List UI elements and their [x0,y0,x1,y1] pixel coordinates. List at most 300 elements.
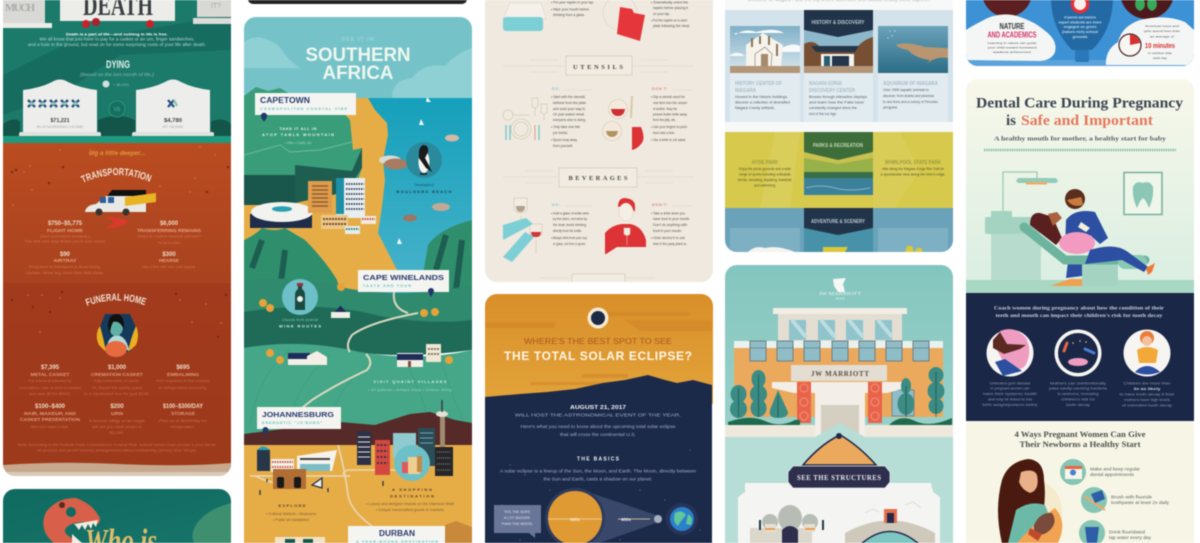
text: napkin don't: napkin before placing it [653,6,688,10]
costs: transportation: Update: More leg room than first class. [26,270,104,275]
text: boulders beach: See penguins at [414,183,434,187]
costs: funeral home: Note: According to the Federal Trade Commission's Funeral Rule, funeral homes must provide a price list for [18,442,217,447]
banner: history and discovery: HISTORY & DISCOVERY [812,20,865,26]
icon: hearse [85,190,156,228]
banner: see the structures [788,466,890,488]
costs: funeral home: URN [111,411,123,416]
houses [288,306,441,367]
card: niagara gorge: end of the Ice Age. [809,112,837,116]
trees [728,367,952,425]
text: beverages don't: have food in your mouth. [653,217,690,221]
stadium [250,202,313,228]
text: quaint villages [368,379,452,392]
text: explore [266,503,316,522]
card: niagara gorge: Browse through interactive displays [809,95,867,99]
text: shopping: DESTINATION [390,494,434,498]
text: bacteria: tooth decay [1066,403,1090,407]
costs: transportation: $300 [162,252,176,258]
costs: funeral home: is refrigerated correctly. [158,385,208,390]
cape town label [255,93,356,122]
landmark buildings [257,446,383,495]
panel: solar eclipse infographic [485,294,713,543]
navy section [966,293,1194,421]
gravestone: at home [132,80,214,137]
logo [819,278,861,300]
cloud: outdoor play: an average of [1150,34,1174,38]
text: utensils don't: • Use a knife to cut salad. [651,138,686,142]
icon: table setting [503,98,547,140]
card: history center: Housed in five historic buildings, [735,95,788,99]
costs: funeral home: $100–$300/DAY [163,404,203,410]
icon: fortune teller [97,314,138,357]
cloud: nature and academics: academic achievement [993,50,1031,54]
sailboats [397,97,431,244]
tip: dental appointments [1060,459,1141,485]
dig a little deeper: dig a little deeper... [89,150,145,157]
mother and baby [998,459,1062,543]
mountains and night sky [485,375,712,543]
heading: utensils [503,56,694,75]
text: beverages do: • Always drink from your cup [551,236,587,240]
card: aquarium [878,26,948,122]
text: beverages don't: • Take a drink when you [651,212,685,216]
text: utensils do: everyone else is doing. [553,118,586,122]
text: napkin do: • Put your napkin in your lap. [551,0,594,4]
section: parks and recreation: HYDE PARK [752,160,778,166]
title: WHERE'S THE BEST SPOT TO SEE [524,337,672,346]
bedrock strip [2,462,232,476]
heading: funeral home: FUNERAL HOME [84,292,147,306]
card: history center: discover a collection of diversified [735,100,790,104]
icon: penguin [406,142,442,178]
cloud: outdoor play: American boys and [1145,24,1179,28]
costs: transportation: The fee is a killer. [157,240,181,245]
heading: the basics: A solar eclipse is a lineup of the Sun, the Moon, and Earth. The Moon, directly between [500,468,696,474]
text: beverages do [551,203,592,246]
text: utensils do: from yourself. [553,144,573,148]
clouds [244,37,472,98]
costs: funeral home: Plus up to $100/day for [159,418,208,423]
text: bacteria: to newborns, increasing [1058,392,1098,396]
tip: dental appointments: Make and keep regular [1090,466,1141,472]
dental unit [985,211,1041,282]
gravestones header: IT? [211,3,221,10]
text: utensils don't: DON'T: [652,87,669,91]
text: table mountain: ATOP TABLE MOUNTAIN [262,132,334,137]
text: beverages do: by the stem, red wine by [553,217,587,221]
circle: child [1124,330,1170,376]
costs: transportation: (Non-cremated remains.) [40,234,91,238]
callout: sun size: A LOT BIGGER [504,516,531,520]
section: parks and recreation: range of sports including volleyball, [739,172,791,176]
icon: clock [1119,34,1141,56]
costs: funeral home: CASKET PRESENTATION [20,417,80,422]
costs: transportation: TRANSFERRING REMAINS [137,228,201,233]
text: bacteria: pass cavity-causing bacteria [1049,386,1107,390]
dome [803,433,876,465]
intro text: and a hole in the ground, but read on for some surprising costs of your life after death. [28,42,206,47]
cape town label: COSMOPOLITAN COASTAL VIBE [260,107,347,111]
costs: transportation: Required to transport a dead body. [29,264,101,269]
section: parks and recreation: Enjoy the picnic grounds and a wide [739,167,791,171]
cloud: outdoor play: in outdoor play [1148,51,1173,55]
text: child risk: 3x as likely [1134,387,1160,391]
title [976,96,1184,142]
text: beverages don't: • Order alcohol if no one [651,236,685,240]
costs: funeral home: $200 [110,404,124,410]
icon: saint mark's basilica [750,505,823,543]
text: beverages don't: DON'T: [652,203,669,207]
text: napkin do [551,0,594,17]
text: explore: • Cultural districts • Museums [266,512,316,516]
card: aquarium: AQUARIUM OF NIAGARA [883,81,938,87]
card: niagara gorge [804,10,873,122]
grass [3,116,231,136]
costs: funeral home: Not required if the corpse [156,378,211,383]
costs: funeral home: $3,000. [110,430,124,435]
gravestone: at home: AT HOME [162,125,184,129]
wine route badge: Choose from several [282,318,318,322]
orange trees [263,287,449,360]
gravestones header [3,0,231,28]
costs: transportation: HEARSE [159,258,179,263]
text: explore: EXPLORE [278,503,306,508]
vineyard hills [244,270,472,435]
soil: transportation [3,143,231,283]
hot air balloon: grounds [1072,35,1088,39]
title: Safe and Important [1021,113,1153,129]
icon: leaves [192,503,231,543]
text: utensils don't: • Dip a utensil used for [651,95,686,99]
cloud: outdoor play: 10 minutes [1145,43,1175,50]
text: bacteria: children's risk for [1061,398,1096,402]
text: shopping: • Unique handcrafted goods in markets [376,508,444,512]
text: utensils do: • Only take one bite [551,125,580,129]
circle: gum disease [986,329,1034,376]
wine route badge [279,279,321,328]
vs badge [109,101,125,117]
costs: funeral home [18,365,217,452]
costs: transportation: AIRTRAY [54,258,76,263]
section: adventure and scenery [725,208,953,252]
text: beverages do: directly from the bottle. [553,229,582,233]
text: utensils do: and work your way in. [553,107,586,111]
eclipse icon [588,308,608,328]
cliffs [244,228,344,292]
card: history center: NIAGARA [735,88,756,94]
costs: transportation: $6,000 [160,221,179,227]
text: utensils do: farthest from the plate [553,101,586,105]
text: child risk: to have tooth decay if their [1120,392,1176,396]
callout: sun size: YES, THE SUN'S [504,510,531,514]
patient in chair [1024,212,1155,286]
intro text: Death is a part of life—and nothing in life is free. [66,32,168,36]
text: shopping [366,487,454,512]
dark card sliver [248,0,467,4]
heading: transportation: TRANSPORTATION [80,167,152,183]
section: parks and recreation: PARKS & RECREATION [813,143,863,149]
text: napkin don't: • Put the napkin on a used [651,18,687,22]
text: beverages do: DO: [552,203,561,207]
text: utensils don't: one item into the vessel [653,101,687,105]
gravestone: nursing home [19,80,101,137]
text: napkin do: drinking from a glass. [553,13,585,17]
card: aquarium: Over 1500 aquatic animals to [883,88,929,92]
costs: transportation: Like a limo with zero curb appeal. [142,264,196,269]
title: THE TOTAL SOLAR ECLIPSE? [504,349,692,363]
text: gum disease: harm their systemic health [983,392,1037,396]
costs: funeral home: in a cardboard box for just $135. [84,391,150,396]
costs: funeral home: METAL CASKET [30,372,70,377]
logo: JW MARRIOTT [819,291,861,296]
intro text [515,405,681,437]
hot air balloon: of parents and teachers [1064,16,1096,20]
text: utensils don't: of another. Keep the [653,107,677,111]
heading: four ways: 4 Ways Pregnant Women Can Give [1014,430,1146,439]
hotel sign [791,365,887,381]
title [504,337,692,363]
icon: trees badge [1120,0,1174,19]
card: niagara gorge: NIAGARA GORGE [809,81,843,87]
section: parks and recreation [725,132,953,208]
panel: nature and academics infographic [966,0,1194,66]
heading: the basics: the Sun and Earth, casts a shadow on our planet. [544,476,652,482]
costs: funeral home: refrigeration. [170,424,196,429]
text: explore: • Public art installation [273,518,309,522]
table mountain [244,87,362,205]
cloud: outdoor play [1106,17,1194,65]
heading: dying: DYING [106,59,130,71]
costs: transportation: The last one-way ticket you'll ever need. [24,238,106,244]
text: utensils don't: food onto a fork. [653,131,675,135]
cloud: nature and academics: your child toward increased [988,46,1037,50]
soil specks [12,167,228,337]
text: beverages do: • Hold a glass of white wine [551,212,589,216]
text: gum disease: Untreated gum disease [990,382,1030,386]
icon: wine hands [503,198,542,262]
heading: the basics: THE BASICS [577,456,620,462]
durban mountain [445,521,472,543]
text: napkin don't [651,0,690,28]
text: child risk: mothers have high levels [1124,398,1170,402]
costs: transportation: Need to switch funeral parlors? [137,234,202,238]
text: utensils don't: from the jelly, etc. [653,118,676,122]
text: beverages don't: else in the party plans to. [653,242,687,246]
text: utensils do [551,87,592,148]
panel: jw marriott venice infographic [725,265,953,543]
text: beverages do: the bowl. Avoid drinking [553,223,586,227]
text: utensils don't [651,87,692,142]
cream section [966,421,1194,543]
logo: VENICE [835,298,845,300]
costs: funeral home: $100–$400 [35,404,66,410]
johannesburg label [257,407,341,436]
text: beverages don't: food in your mouth. [653,229,682,233]
intro text: Here's what you need to know about the upcoming total solar eclipse [520,424,676,429]
panel: dental care during pregnancy infographic [966,79,1194,543]
text: shopping: A SHOPPING [392,487,432,492]
text: beverages do: or glass, not from a spoon. [553,242,586,246]
soil: funeral home [3,283,231,468]
card: aquarium: discover, from sharks and piranhas [883,94,934,98]
hotel building [734,308,943,437]
heading: four ways [1014,430,1146,449]
sun moon earth diagram [545,488,698,543]
costs: funeral home: $1,000 [108,365,127,371]
costs: transportation: $90 [60,252,71,258]
gravestone: nursing home: IN A NURSING HOME [36,125,84,129]
costs: funeral home: Fully combustible, of course. [94,378,140,383]
text: utensils do: DO: [552,87,561,91]
forecourt wall [725,425,953,437]
text: napkin don't: plate following the meal. [653,24,690,28]
text: bacteria: Mothers can unintentionally [1050,382,1106,386]
section intro: teeth and mouth can impact their children's risk for tooth decay [996,313,1163,319]
tip: brushing [1081,487,1170,513]
text: boulders beach [396,183,452,194]
costs: funeral home: EMBALMING [167,372,200,377]
costs: funeral home: STORAGE [171,411,195,416]
section: parks and recreation: tennis, canoeing, kayaking, baseball, [738,178,792,182]
costs: funeral home: $695 [176,365,190,371]
text: boulders beach: BOULDERS BEACH [396,189,452,194]
cape town label: CAPETOWN [260,96,310,105]
cape winelands label: CAPE WINELANDS [363,273,444,282]
costs: funeral home: For a funeral followed by [28,378,72,383]
panel: southern africa infographic [244,17,472,543]
icon: t-rex skull [43,498,100,543]
panel: cost of death infographic [2,0,232,476]
gravestone: nursing home: $71,221 [50,118,70,124]
section: parks and recreation: and swimming. [754,184,776,188]
tip: fluoridated water: tap water every day [1109,535,1152,540]
heading: four ways: Their Newborns a Healthy Start [1020,440,1141,449]
durban building [275,537,325,543]
intro text: WILL HOST THE ASTRONOMICAL EVENT OF THE YEAR. [515,412,681,418]
costs: transportation: FLIGHT HOME [47,228,83,233]
costs: transportation: $750–$5,775 [48,221,83,227]
cloud: nature and academics: Learning in nature can guide [988,41,1037,45]
text: gum disease: in pregnant women can [990,386,1030,390]
section intro [994,306,1165,319]
section: parks and recreation: WHIRLPOOL STATE PARK [885,160,941,166]
cloud: nature and academics: NATURE [1000,22,1025,31]
title: SEE IT IN [341,37,375,43]
cape winelands label: TASTE AND TOUR [363,284,411,288]
heading: the basics [500,456,696,482]
hatched rule [984,149,1176,151]
circle: bacteria [1054,330,1102,376]
durban label [348,526,445,543]
title: AFRICA [322,63,394,84]
text: utensils don't: • Use your fingers to push [651,125,687,129]
title: Dental Care During Pregnancy [976,96,1184,112]
road [302,292,418,408]
section: adventure and scenery: ADVENTURE & SCENERY [811,219,866,225]
text: bacteria [1049,382,1107,407]
intro text: We all know that you have to pay for a casket or an urn, finger sandwiches, [40,36,194,42]
text: utensils do: per forkful. [553,131,568,135]
sun moon earth diagram: 400x [570,517,581,522]
dental lamp [1003,172,1058,212]
gravestone: at home: $4,780 [164,118,182,124]
text: quaint villages: VISIT QUAINT VILLAGES [374,379,447,384]
floor [966,280,1194,293]
costs: funeral home: all services and permit funerary arrangements without embalming (among other things). [37,448,197,452]
heading: beverages: BEVERAGES [568,175,628,182]
section: parks and recreation: Hike along the Niagara Gorge Rim Trail for [882,167,945,171]
intro text: AUGUST 21, 2017 [570,405,626,411]
card: aquarium: to sea lions and a colony of Peruvian [883,100,938,104]
heading: next section [540,274,655,288]
sun moon earth diagram: 400x [621,517,632,522]
card: niagara gorge: constantly changed since the [809,106,857,110]
heading: dying [80,59,155,88]
card: history center [730,26,800,122]
sea [360,98,472,298]
costs: funeral home: cremation, use a rent-a-casket [19,385,82,390]
cape winelands label [358,270,449,297]
card: niagara gorge: DISCOVERY CENTER [809,88,855,94]
text: beverages don't: Don't do anything with [653,223,687,227]
hot air balloon: report students are more [1058,20,1102,24]
heading: dying: = $5,000 [113,82,129,87]
text: table mountain [262,126,334,145]
heading: utensils: UTENSILS [573,64,623,71]
title: SOUTHERN [306,45,410,66]
vs badge: VS [114,107,121,113]
bottom haze [966,60,1194,66]
intro text [28,32,206,47]
tip: brushing: toothpaste at least 2x daily [1111,500,1170,505]
johannesburg label: JOHANNESBURG [262,410,334,419]
mountains [244,412,472,450]
tip: dental appointments: dental appointments [1090,472,1134,477]
heading: dying: (Based on the last month of life.) [80,72,155,77]
costs: funeral home: will set you back closer to [92,424,143,429]
intro text: that will cross the continental U.S. [560,432,636,437]
icon: pitcher [503,3,546,31]
dentist [1050,189,1108,286]
card: aquarium: penguins. [883,106,898,110]
section: parks and recreation: a spectacular view along the river's edge. [880,172,946,176]
card: niagara gorge: and learn how the Falls have [809,100,864,104]
text: quaint villages: • Art galleries • Antique shops • Outdoor dining [368,388,452,392]
shopping badge [394,445,430,481]
text: utensils do: • Spoon soup away [551,138,577,142]
text: utensils don't: peanut butter knife away [653,112,687,116]
card: history center: HISTORY CENTER OF [735,81,782,87]
panel: dinosaur infographic [3,489,231,543]
costs: funeral home: and save ($700–$900). [29,391,71,396]
section intro: Coach women during pregnancy about how the condition of their [994,306,1165,312]
night stars [502,450,700,540]
costs: funeral home: CREMATION CASKET [91,372,143,377]
text: napkin don't: • Dramatically unfurl the [651,0,688,4]
costs: funeral home: Or, depart this earthly plane [92,385,143,390]
icon: rialto bridge [845,502,935,543]
text: gum disease: birth weight/preterm births [982,403,1038,407]
text: child risk: of untreated tooth decay [1122,404,1172,408]
tip: fluoridated water: Drink fluoridated [1109,530,1146,534]
structures card [738,483,940,543]
johannesburg label: ENERGETIC "JO'BURG" [262,421,322,425]
city buildings [308,178,376,234]
callout: sun size: THAN THE MOON. [501,522,533,526]
costs: funeral home: A bronze effigy of an eagle [89,418,146,423]
text: shopping: • Luxury and designer brands on the Diamond Walk [366,502,454,506]
text: child risk [1120,382,1176,408]
